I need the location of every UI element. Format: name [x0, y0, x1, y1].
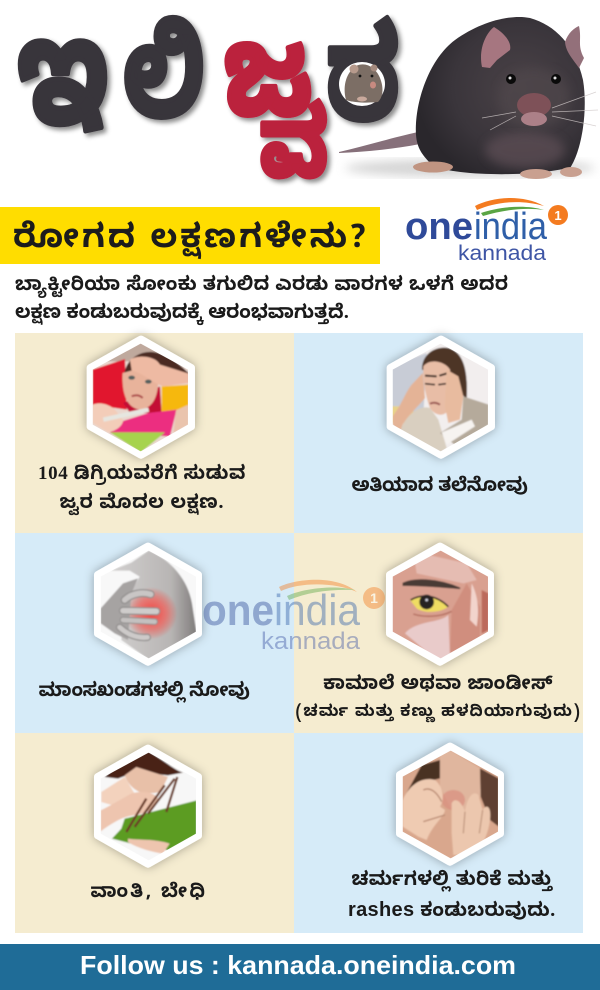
intro text: ಲಕ್ಷಣ ಕಂಡುಬರುವುದಕ್ಕೆ ಆರಂಭವಾಗುತ್ತದೆ.	[15, 302, 349, 329]
caption: ಮಾಂಸಖಂಡಗಳಲ್ಲಿ ನೋವು	[39, 680, 251, 707]
icon: woman vomiting	[98, 749, 198, 864]
watermark: oneindia kannada logo: one	[202, 586, 274, 635]
caption: ಚರ್ಮಗಳಲ್ಲಿ ತುರಿಕೆ ಮತ್ತು	[352, 869, 553, 896]
panel: muscle pain	[15, 533, 294, 733]
icon: yellow eye	[390, 547, 490, 662]
footer banner: Follow us : kannada.oneindia.com	[80, 950, 516, 980]
icon: woman with thermometer	[90, 340, 191, 455]
logo: oneindia kannada: kannada	[458, 242, 546, 265]
panel: skin rash	[294, 733, 583, 933]
watermark: oneindia kannada logo	[202, 580, 385, 655]
watermark: oneindia kannada logo: kannada	[261, 628, 361, 655]
icon: woman with headache	[390, 340, 491, 455]
title: rat fever heading: ಲಿ	[123, 16, 205, 183]
logo: oneindia kannada: india	[474, 206, 548, 248]
panel: headache	[294, 333, 583, 533]
logo: oneindia kannada: one	[405, 206, 473, 248]
title: rat fever heading: ಇ	[17, 5, 109, 202]
caption	[348, 869, 556, 927]
caption: rashes ಕಂಡುಬರುವುದು.	[348, 899, 556, 927]
title: rat fever heading: ವ	[260, 98, 328, 228]
caption: ವಾಂತಿ, ಬೇಧಿ	[90, 881, 206, 908]
heading banner: what are the symptoms: ರೋಗದ ಲಕ್ಷಣಗಳೇನು?	[13, 220, 366, 265]
caption: (ಚರ್ಮ ಮತ್ತು ಕಣ್ಣು ಹಳದಿಯಾಗುವುದು)	[296, 703, 580, 725]
caption	[38, 463, 246, 519]
caption: ಜ್ವರ ಮೊದಲ ಲಕ್ಷಣ.	[60, 492, 224, 519]
caption: 104 ಡಿಗ್ರಿಯವರೆಗೆ ಸುಡುವ	[38, 463, 246, 485]
logo: oneindia kannada	[405, 198, 568, 265]
watermark: oneindia kannada logo: 1	[370, 590, 378, 606]
icon: small mouse inside the title letter	[339, 62, 385, 106]
panel: fever	[15, 333, 294, 533]
title: rat fever heading: ರ	[326, 15, 400, 189]
logo: oneindia kannada: 1	[554, 208, 562, 223]
icon: hand on painful shoulder	[98, 547, 198, 662]
title: rat fever heading: ಜ	[224, 13, 312, 182]
panel: jaundice	[294, 533, 583, 733]
title: rat fever heading	[17, 5, 400, 228]
caption: ಅತಿಯಾದ ತಲೆನೋವು	[352, 475, 528, 502]
intro text: ಬ್ಯಾಕ್ಟೀರಿಯಾ ಸೋಂಕು ತಗುಲಿದ ಎರಡು ವಾರಗಳ ಒಳಗೆ ಅದರ	[15, 274, 508, 301]
footer banner	[0, 944, 600, 990]
watermark: oneindia kannada logo: india	[274, 586, 360, 635]
caption	[296, 673, 580, 725]
illustration: black rat	[339, 17, 598, 179]
intro text	[15, 274, 508, 329]
icon: scratching skin	[400, 747, 500, 862]
caption: ಕಾಮಾಲೆ ಅಥವಾ ಜಾಂಡೀಸ್	[323, 673, 553, 700]
panel: vomiting	[15, 733, 294, 933]
